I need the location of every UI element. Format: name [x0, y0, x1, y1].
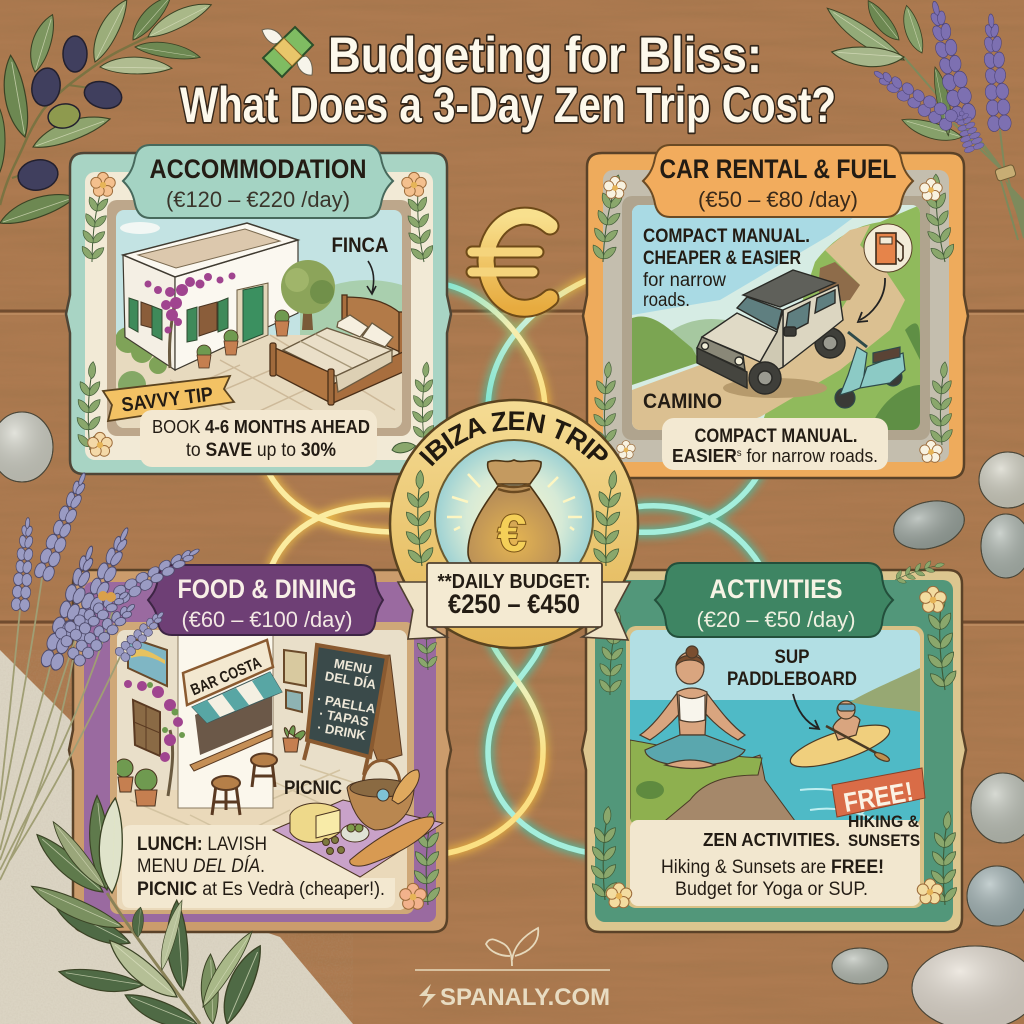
- arched title: [404, 430, 624, 540]
- bed: [270, 295, 404, 405]
- note: hiking and sunsets: [848, 812, 920, 850]
- garlands and flowers: [589, 554, 960, 908]
- central medallion: ibiza zen trip: [388, 398, 640, 650]
- panel: activities: [582, 554, 966, 932]
- caption: car tip: EASIER: [672, 446, 737, 466]
- bougainvillea: [144, 272, 236, 368]
- laurel wreath: [400, 469, 625, 567]
- decoration: lavender left: [0, 469, 204, 880]
- caption: zen activities: ZEN ACTIVITIES.: [703, 830, 840, 850]
- icon: money bag: €: [498, 505, 526, 563]
- panel: car rental and fuel: [583, 145, 968, 478]
- icon: flying money: [262, 27, 313, 77]
- garlands and flowers: [412, 597, 442, 905]
- glowing ribbons connecting panels: [266, 280, 760, 853]
- caption: booking tip: to SAVE up to 30%: [186, 440, 336, 461]
- heading: accommodation: (€120 – €220 /day): [166, 187, 350, 212]
- label: finca with arrow: FINCA: [332, 234, 388, 257]
- note: hiking and sunsets: HIKING &: [848, 812, 919, 831]
- menu chalkboard: · PAELLA: [316, 691, 377, 716]
- heading: activities: [655, 563, 893, 637]
- scooter: [835, 332, 905, 408]
- heading: activities: ACTIVITIES: [710, 574, 842, 604]
- heading: car rental: [643, 145, 913, 217]
- caption: lunch tip: PICNIC at Es Vedrà (cheaper!).: [137, 879, 385, 900]
- illustration: coastal road scene: [632, 205, 920, 430]
- label: sup paddleboard with arrow: PADDLEBOARD: [727, 669, 857, 690]
- wall paintings: [128, 637, 306, 712]
- cliff: [630, 740, 798, 825]
- caption: zen activities: Hiking & Sunsets are FREE!: [661, 857, 884, 878]
- white bar building: BAR COSTA: [188, 654, 264, 699]
- ribbon: daily budget: €250 – €450: [448, 589, 580, 619]
- jeep: [697, 270, 845, 398]
- scene note: compact manual: CHEAPER & EASIER: [643, 248, 801, 269]
- decoration: lavender bunch top right: [821, 0, 1024, 240]
- illustration: picnic spread: [273, 760, 443, 877]
- white bar building: [178, 630, 282, 808]
- label: finca with arrow: [332, 234, 388, 294]
- logo: spanaly.com: SPANALY.COM: [440, 984, 610, 1011]
- fuel pump icon: [864, 224, 912, 272]
- caption: booking tip: [140, 410, 377, 467]
- caption: zen activities: [661, 830, 884, 900]
- menu chalkboard: · TAPAS: [318, 706, 370, 729]
- illustration: finca scene: [115, 210, 404, 428]
- tag: free: FREE!: [841, 776, 916, 818]
- heading: food and dining: [148, 565, 383, 635]
- menu chalkboard: [304, 645, 402, 775]
- ribbon: daily budget: [398, 563, 630, 640]
- garlands and flowers: [588, 172, 958, 462]
- decoration: olive branch top left: [0, 0, 214, 230]
- arrow to road: [858, 278, 885, 322]
- scene note: compact manual: roads.: [643, 290, 690, 311]
- logo: spanaly.com: [415, 928, 610, 1011]
- white house: [123, 223, 298, 370]
- caption: lunch tip: MENU DEL DÍA.: [137, 856, 265, 877]
- menu chalkboard: DEL DÍA: [324, 668, 378, 692]
- ribbon: daily budget: **DAILY BUDGET:: [438, 571, 590, 593]
- label: camino: CAMINO: [643, 390, 722, 413]
- road: [632, 225, 905, 430]
- title: [180, 27, 836, 133]
- paddleboard with snorkeler: [790, 700, 890, 768]
- icon: large golden euro: [472, 216, 550, 308]
- heading: food and dining: (€60 – €100 /day): [182, 607, 352, 632]
- heading: car rental: (€50 – €80 /day): [698, 187, 858, 212]
- potted plants: [115, 726, 305, 806]
- caption: zen activities: Budget for Yoga or SUP.: [675, 879, 868, 900]
- plants and pots: [197, 310, 289, 368]
- garden shrubs: [116, 328, 167, 388]
- ribbon: savvy tip: SAVVY TIP: [120, 384, 214, 417]
- scene note: compact manual: COMPACT MANUAL.: [643, 226, 810, 247]
- heading: car rental: CAR RENTAL & FUEL: [660, 154, 896, 184]
- scene note: compact manual: for narrow: [643, 270, 726, 291]
- scene note: compact manual: [643, 226, 810, 311]
- illustration: yoga and paddleboard scene: [630, 630, 920, 825]
- caption: booking tip: BOOK 4-6 MONTHS AHEAD: [152, 417, 370, 437]
- garlands and flowers: [74, 172, 437, 456]
- stools: [212, 754, 277, 815]
- icon: sprout: [486, 928, 538, 966]
- panel: food and dining: [69, 565, 451, 932]
- menu chalkboard: MENU: [333, 656, 373, 677]
- caption: lunch tip: [137, 834, 385, 900]
- central medallion: ibiza zen trip: IBIZA ZEN TRIP: [418, 411, 608, 466]
- caption background: [630, 820, 920, 906]
- title: What Does a 3-Day Zen Trip Cost?: [180, 77, 836, 133]
- caption: car tip: for narrow roads.: [742, 446, 878, 466]
- heading: activities: (€20 – €50 /day): [696, 607, 856, 632]
- note: hiking and sunsets: SUNSETS: [848, 831, 920, 850]
- caption: car tip: s: [737, 448, 742, 459]
- illustration: bar scene: [115, 630, 407, 910]
- heading: accommodation: [123, 145, 393, 218]
- left window with vine: [124, 680, 185, 796]
- heading: food and dining: FOOD & DINING: [178, 574, 356, 604]
- heading: accommodation: ACCOMMODATION: [150, 154, 366, 184]
- caption: car tip: [662, 418, 888, 470]
- sun rays: [447, 474, 582, 530]
- decoration: olive branch bottom left: [27, 795, 268, 1024]
- ribbon: savvy tip: [103, 376, 234, 421]
- caption: lunch box: [122, 825, 395, 908]
- panel: accommodation: [66, 145, 451, 474]
- icon: money bag: [468, 460, 560, 575]
- caption: car tip: COMPACT MANUAL.: [694, 426, 858, 447]
- menu chalkboard: · DRINK: [316, 720, 368, 743]
- title: Budgeting for Bliss:: [328, 27, 762, 83]
- decoration: river stones: [0, 412, 1024, 1024]
- caption: lunch tip: LUNCH: LAVISH: [137, 834, 267, 855]
- olive tree: [281, 260, 335, 330]
- label: picnic: PICNIC: [284, 778, 342, 799]
- flower ornament: [400, 883, 426, 909]
- linen cloth: [0, 650, 353, 1024]
- label: sup paddleboard with arrow: [727, 647, 857, 729]
- meditating woman: [640, 646, 745, 768]
- label: sup paddleboard with arrow: SUP: [774, 647, 810, 668]
- icon: s mark: [419, 984, 436, 1008]
